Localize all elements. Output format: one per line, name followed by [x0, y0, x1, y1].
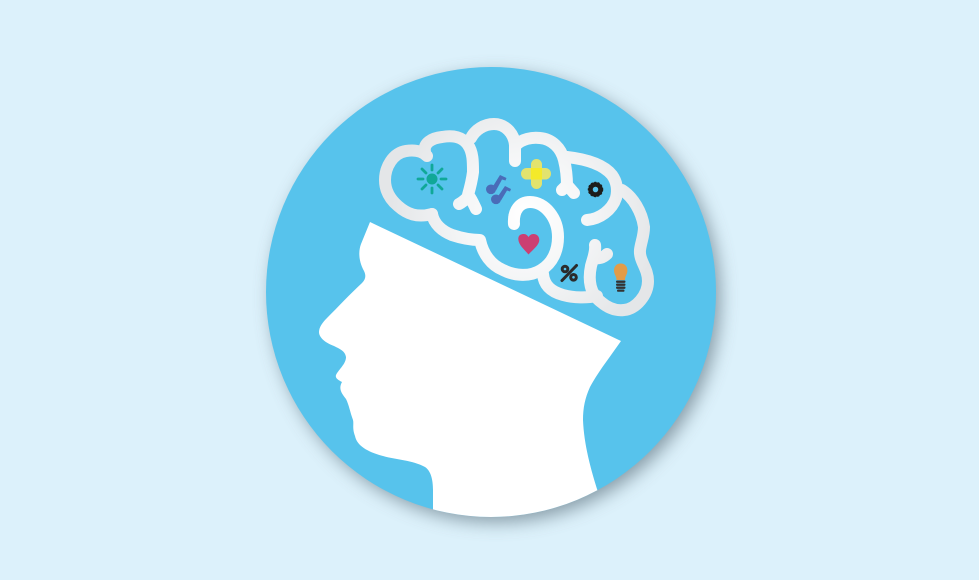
- top right lobe fork: [562, 185, 574, 193]
- top centre lobe: [471, 124, 515, 161]
- upper left lobe: [425, 136, 473, 195]
- icon: light bulb: [614, 264, 627, 292]
- icon: plus: [521, 159, 551, 189]
- icon: percent: [562, 266, 576, 280]
- circle shadow: [272, 74, 720, 522]
- blue circle: [266, 67, 716, 517]
- upper right lobe and curl: [567, 157, 617, 220]
- knob on right lobe: [594, 254, 607, 258]
- lower lobe and spiral: [432, 202, 558, 275]
- right lobe: [590, 190, 648, 310]
- left lobe: [385, 151, 432, 216]
- icon: heart: [518, 234, 539, 254]
- icon: gear: [588, 182, 602, 196]
- icon: music notes: [486, 175, 511, 204]
- head silhouette: [319, 222, 621, 530]
- upper left lobe fork: [459, 196, 476, 209]
- top right lobe: [516, 138, 567, 186]
- icon: sun: [418, 165, 446, 193]
- brain outline: [385, 124, 648, 310]
- infographic illustration: [260, 62, 732, 534]
- bottom lobe: [543, 274, 597, 297]
